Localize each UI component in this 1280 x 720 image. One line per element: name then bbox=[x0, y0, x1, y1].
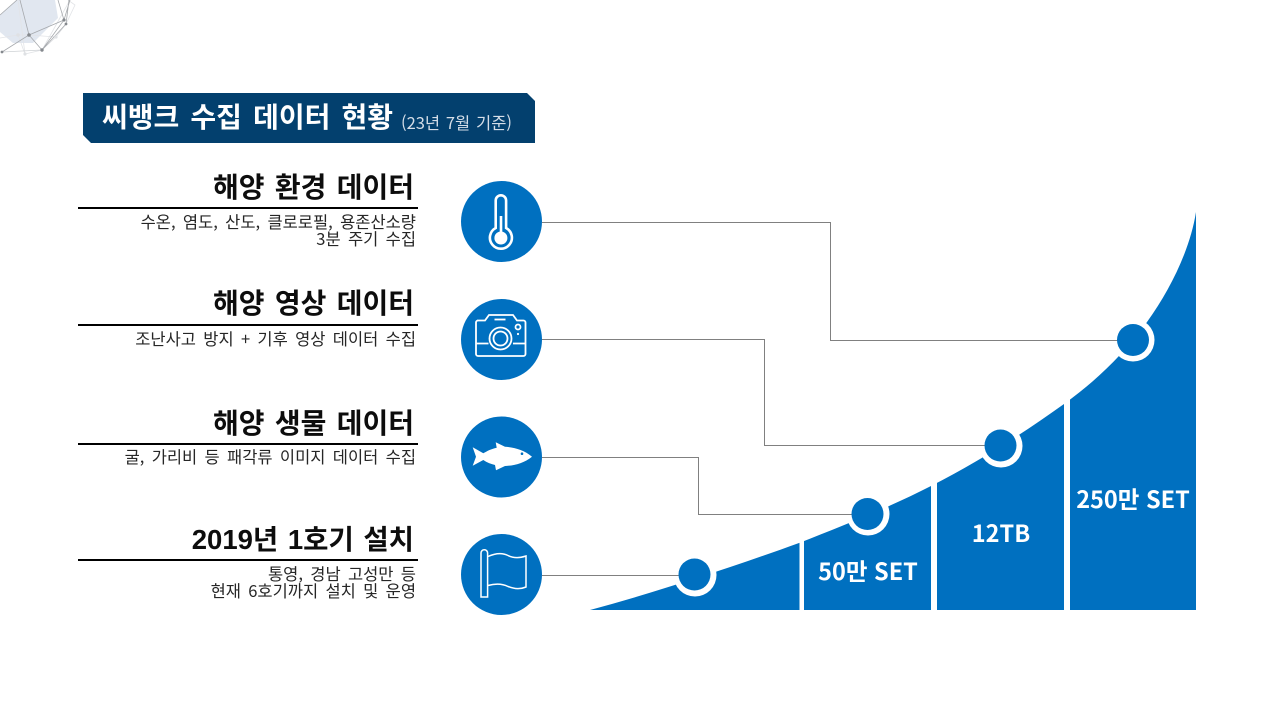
text block: marine environment data: 3분 주기 수집 bbox=[316, 226, 416, 250]
icon: fish bbox=[461, 416, 542, 498]
growth curve chart bbox=[590, 212, 1196, 612]
icon: thermometer bbox=[461, 181, 542, 262]
decoration: polygon network corner bbox=[0, 0, 75, 56]
title banner: (23년 7월 기준) bbox=[401, 110, 512, 134]
text block: marine biology data: 해양 생물 데이터 bbox=[213, 402, 414, 442]
text block: first unit installed in 2019 bbox=[78, 524, 418, 602]
text block: marine biology data bbox=[78, 402, 418, 468]
text block: marine environment data: 수온, 염도, 산도, 클로로필, 용존산소량 bbox=[141, 209, 416, 233]
title banner: 씨뱅크 수집 데이터 현황 bbox=[102, 96, 393, 136]
text block: marine biology data: 굴, 가리비 등 패각류 이미지 데이터 수집 bbox=[125, 444, 416, 468]
text block: first unit installed in 2019: 통영, 경남 고성만 등 bbox=[268, 561, 416, 585]
icon: camera bbox=[461, 299, 542, 380]
title banner bbox=[83, 93, 535, 143]
text block: first unit installed in 2019: 2019년 1호기 설치 bbox=[192, 524, 414, 555]
icon: flag bbox=[461, 534, 542, 615]
timeline markers bbox=[678, 324, 1149, 590]
text block: marine video data: 해양 영상 데이터 bbox=[213, 282, 414, 322]
text block: marine video data bbox=[78, 282, 418, 350]
value label: 50만 SET: 50만 SET bbox=[818, 553, 918, 587]
value label: 12TB: 12TB bbox=[972, 515, 1030, 549]
connector lines bbox=[542, 222, 1118, 576]
text block: first unit installed in 2019: 현재 6호기까지 설치 및 운영 bbox=[211, 578, 416, 602]
text block: marine environment data: 해양 환경 데이터 bbox=[213, 166, 414, 206]
value label: 250만 SET: 250만 SET bbox=[1076, 481, 1190, 515]
text block: marine environment data bbox=[78, 166, 418, 250]
text block: marine video data: 조난사고 방지 + 기후 영상 데이터 수집 bbox=[135, 326, 416, 350]
